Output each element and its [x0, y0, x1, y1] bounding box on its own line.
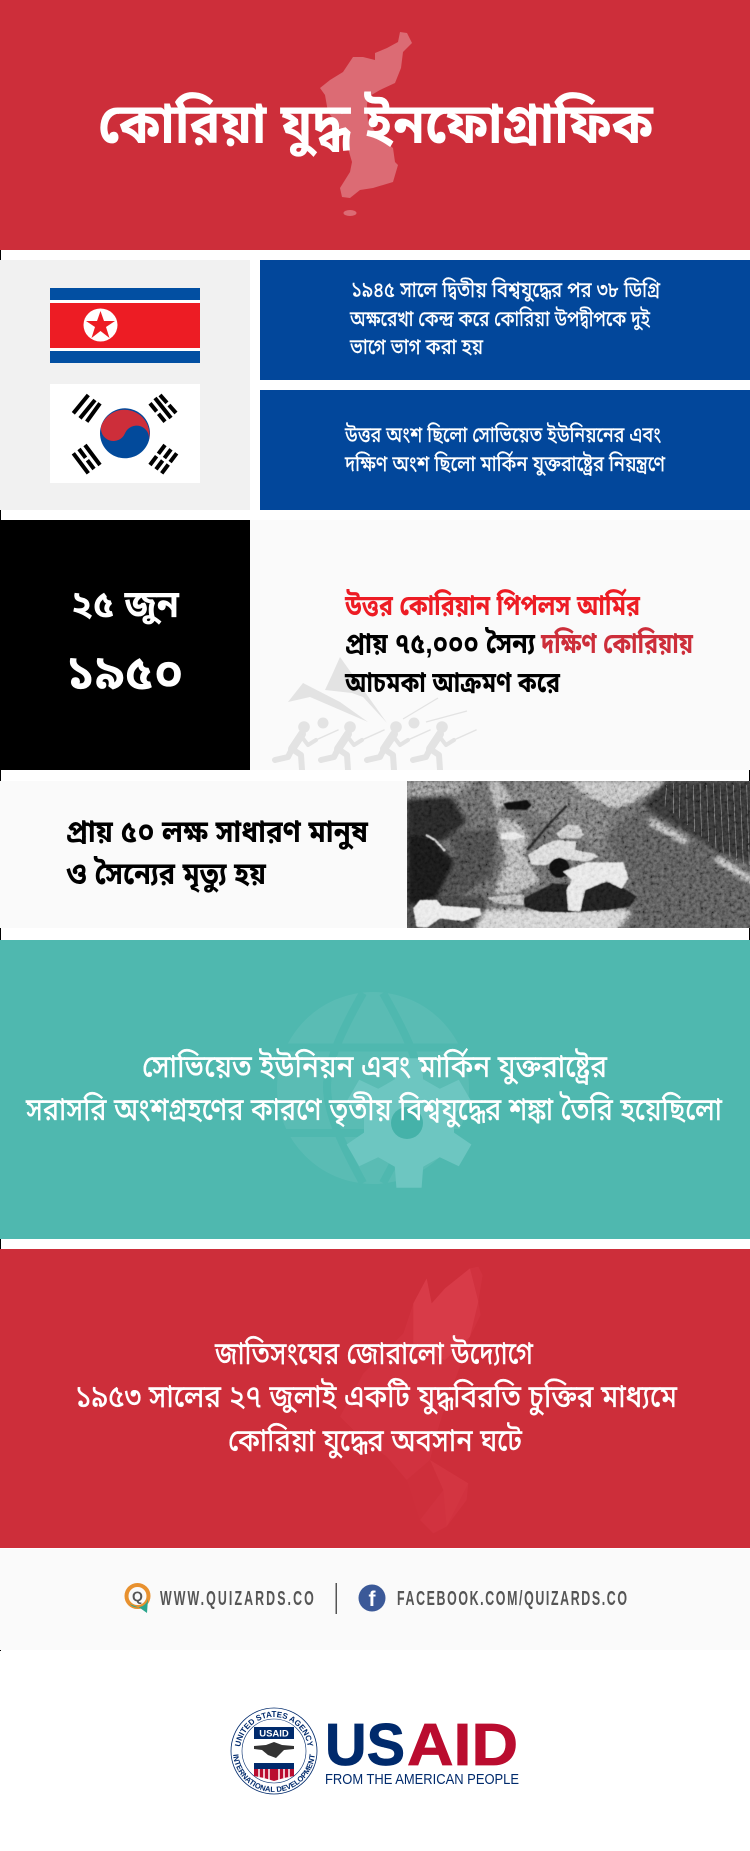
panel: header	[0, 0, 750, 250]
armistice text	[75, 1336, 678, 1458]
text	[349, 277, 661, 359]
icon: facebook	[358, 1584, 386, 1612]
title: কোরিয়া যুদ্ধ ইনফোগ্রাফিক	[98, 92, 654, 158]
invasion text: উত্তর কোরিয়ান পিপলস আর্মির	[344, 588, 641, 622]
superpowers text: সোভিয়েত ইউনিয়ন এবং মার্কিন যুক্তরাষ্ট্রের	[142, 1048, 607, 1085]
casualties text: প্রায় ৫০ লক্ষ সাধারণ মানুষ	[66, 814, 369, 850]
flag: North Korea	[50, 288, 200, 363]
superpowers text	[25, 1048, 723, 1127]
icon: charging soldiers watermark	[275, 657, 476, 770]
invasion text: দক্ষিণ কোরিয়ায়	[540, 627, 693, 660]
icon: globe watermark	[277, 992, 469, 1184]
armistice text: কোরিয়া যুদ্ধের অবসান ঘটে	[228, 1423, 523, 1458]
logo: USAID	[230, 1708, 519, 1794]
date text	[66, 584, 183, 700]
text: ১৯৪৫ সালে দ্বিতীয় বিশ্বযুদ্ধের পর ৩৮ ডিগ্রি	[351, 277, 661, 303]
panel: armistice	[0, 1249, 750, 1548]
text: ভাগে ভাগ করা হয়	[349, 335, 483, 359]
casualties text	[66, 814, 369, 893]
date text: ১৯৫০	[66, 647, 183, 700]
panel: invasion	[272, 588, 694, 770]
text: দক্ষিণ অংশ ছিলো মার্কিন যুক্তরাষ্ট্রের নিয়ন্ত্রণে	[344, 450, 666, 477]
text	[344, 422, 666, 477]
invasion text	[344, 588, 693, 699]
website text: WWW.QUIZARDS.CO	[160, 1587, 314, 1610]
text: অক্ষরেখা কেন্দ্র করে কোরিয়া উপদ্বীপকে দুই	[349, 306, 650, 331]
panel: flags	[0, 260, 250, 510]
USAID wordmark: US	[325, 1712, 405, 1778]
icon: dove watermark	[340, 1267, 483, 1533]
panel: occupation zones	[260, 390, 750, 510]
facebook text: FACEBOOK.COM/QUIZARDS.CO	[397, 1587, 627, 1610]
panel: 38th parallel	[260, 260, 750, 380]
panel: casualties	[0, 781, 407, 928]
logo: USAID: AID	[407, 1712, 518, 1778]
invasion text: প্রায় ৭৫,০০০ সৈন্য	[345, 627, 536, 660]
icon: facebook: f	[368, 1588, 376, 1611]
icon: quizards logo	[126, 1585, 148, 1613]
armistice text: ১৯৫৩ সালের ২৭ জুলাই একটি যুদ্ধবিরতি চুক্তির মাধ্যমে	[75, 1379, 678, 1416]
text: উত্তর অংশ ছিলো সোভিয়েত ইউনিয়নের এবং	[344, 422, 661, 447]
USAID seal: INTERNATIONAL DEVELOPMENT	[233, 1754, 315, 1792]
casualties text: ও সৈন্যের মৃত্যু হয়	[66, 855, 267, 893]
panel: superpowers	[0, 940, 750, 1239]
flag: South Korea	[50, 384, 200, 483]
panel: date	[0, 520, 250, 770]
USAID seal	[230, 1708, 318, 1794]
photo: bodies on a dirt road	[407, 781, 750, 932]
USAID seal: USAID	[259, 1728, 289, 1740]
date text: ২৫ জুন	[71, 584, 180, 626]
icon: quizards logo: Q	[132, 1588, 143, 1604]
armistice text: জাতিসংঘের জোরালো উদ্যোগে	[214, 1336, 534, 1371]
invasion text: আচমকা আক্রমণ করে	[344, 667, 561, 699]
map of Korea	[320, 32, 412, 216]
icon: gear watermark	[347, 1058, 471, 1188]
USAID seal: UNITED STATES AGENCY	[234, 1711, 314, 1746]
USAID tagline: FROM THE AMERICAN PEOPLE	[325, 1771, 519, 1788]
panel: footer links	[0, 1549, 750, 1650]
